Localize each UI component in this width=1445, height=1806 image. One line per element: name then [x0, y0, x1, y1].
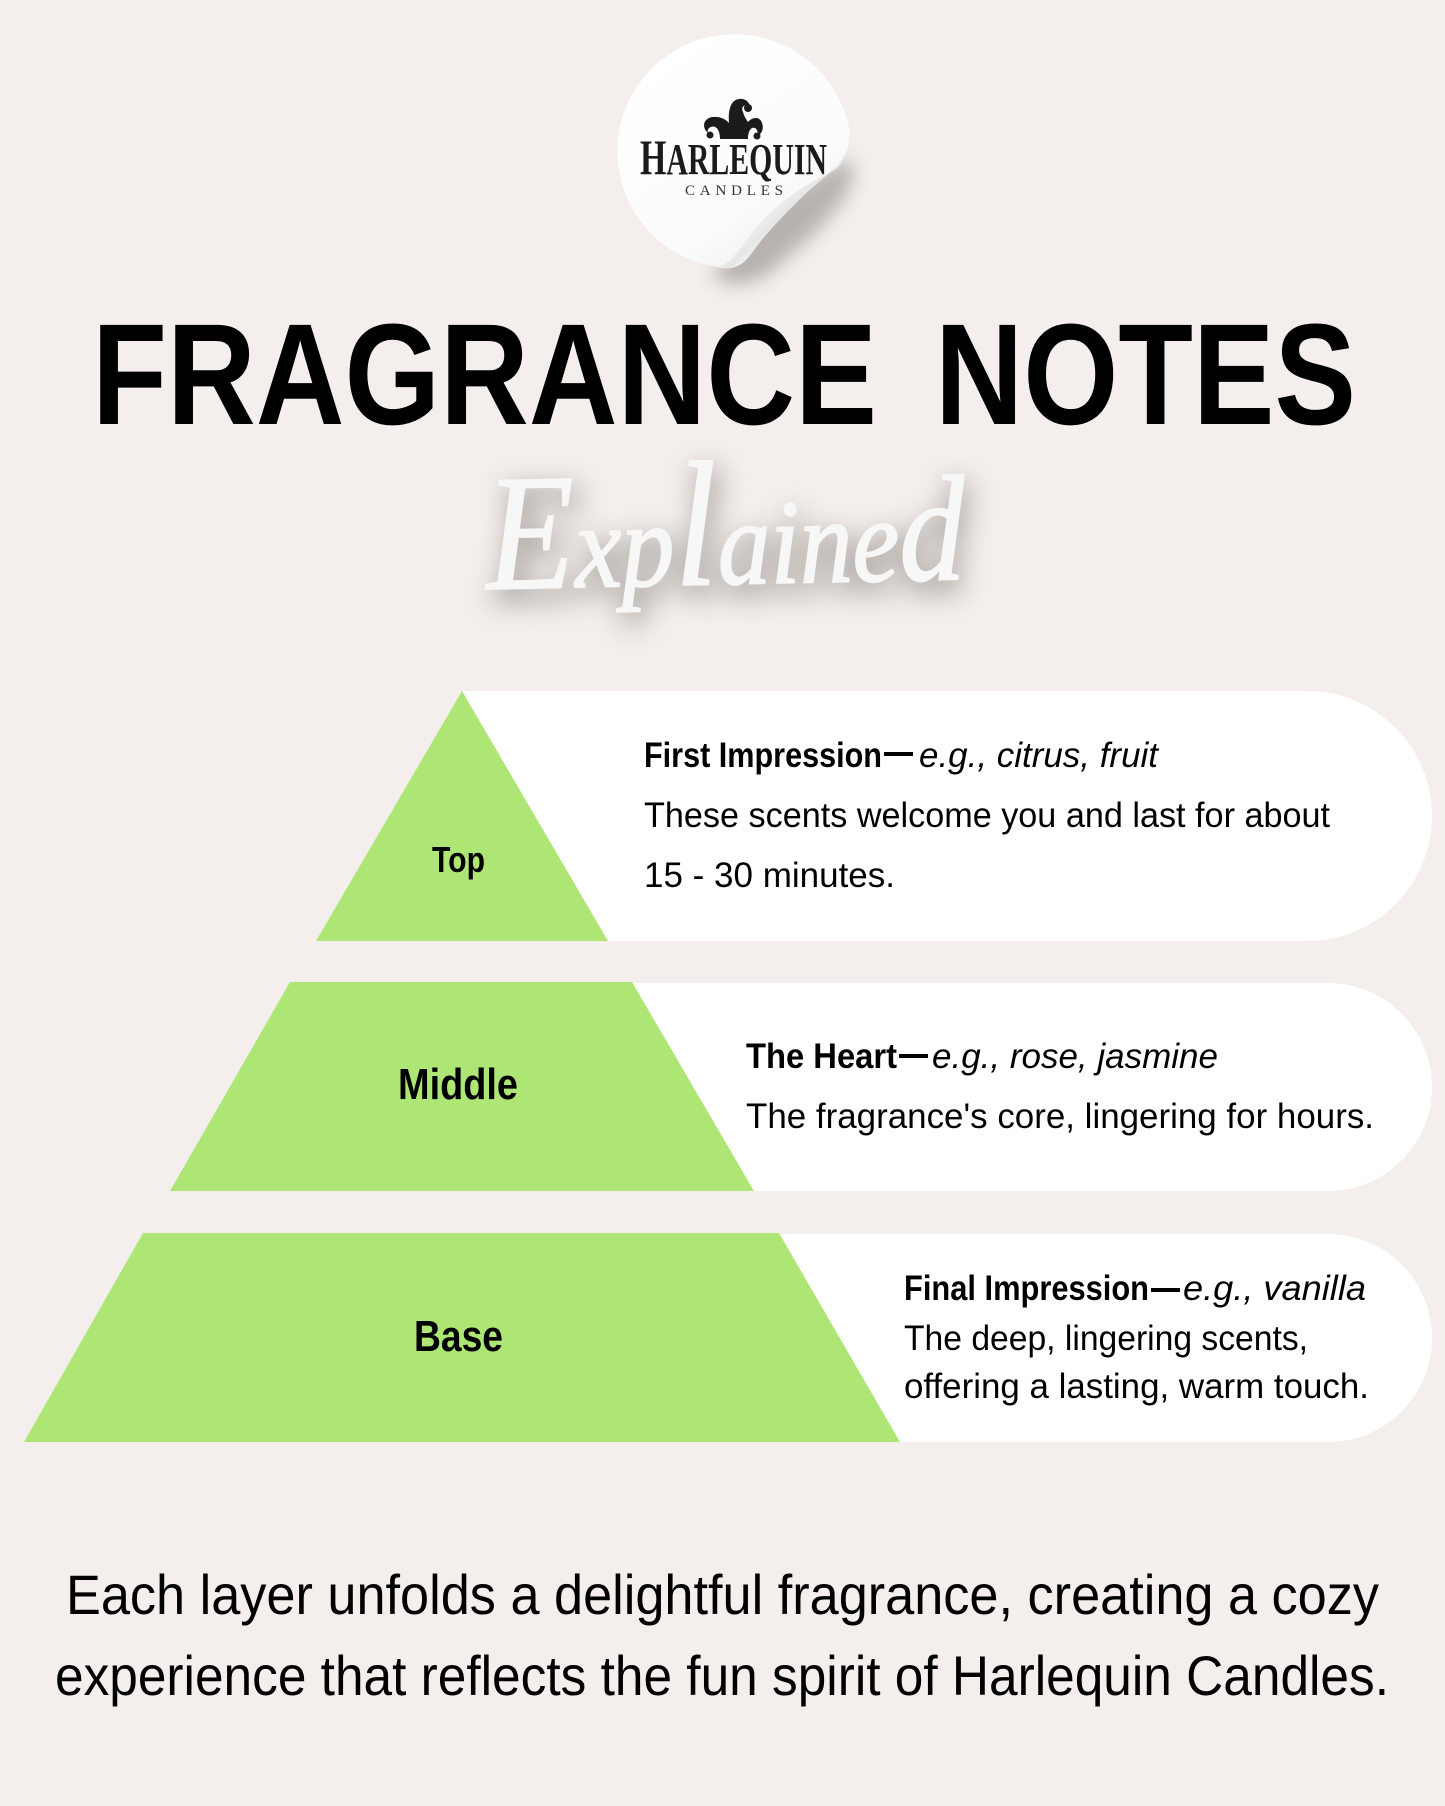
- title: NOTES: [935, 294, 1356, 455]
- text: top note heading: e.g., citrus, fruit: [919, 736, 1159, 775]
- panel: middle note card: [170, 982, 1432, 1191]
- text: top note heading: First Impression: [644, 736, 882, 775]
- label: Top: Top: [432, 839, 485, 880]
- text: middle note heading: [746, 1037, 1218, 1076]
- text: middle note body: The fragrance's core, lingering for hours.: [746, 1097, 1374, 1136]
- title: FRAGRANCE: [92, 294, 877, 455]
- panel: top note card: [316, 691, 1432, 941]
- text: base note body: [904, 1319, 1369, 1406]
- text: middle note heading: The Heart: [746, 1037, 897, 1076]
- icon: jester hat: [704, 99, 763, 140]
- text: middle note heading: e.g., rose, jasmine: [932, 1037, 1218, 1076]
- subtitle: Explained: Explained: [482, 420, 968, 628]
- logo sticker: [617, 34, 853, 284]
- logo wordmark: HARLEQUIN: [640, 129, 827, 185]
- text: top note body: These scents welcome you and last for about: [644, 796, 1330, 835]
- text: base note heading: [904, 1269, 1366, 1308]
- label: Middle: Middle: [398, 1060, 518, 1109]
- text: base note heading: e.g., vanilla: [1183, 1269, 1366, 1308]
- panel: base note card: [24, 1233, 1432, 1442]
- text: top note body: 15 - 30 minutes.: [644, 856, 895, 895]
- text: base note body: offering a lasting, warm touch.: [904, 1367, 1369, 1406]
- closing statement: [55, 1563, 1389, 1707]
- text: top note heading: [644, 736, 1159, 775]
- text: top note body: [644, 796, 1330, 895]
- pyramid tier: base: [24, 1233, 900, 1442]
- logo subtitle: CANDLES: [685, 183, 783, 199]
- closing statement: Each layer unfolds a delightful fragrance, creating a cozy: [66, 1563, 1379, 1626]
- subtitle: Explained: Explained: [488, 430, 970, 638]
- text: base note heading: Final Impression: [904, 1269, 1149, 1308]
- pyramid tier: middle: [170, 982, 754, 1191]
- text: base note body: The deep, lingering scents,: [904, 1319, 1308, 1358]
- label: Base: Base: [414, 1312, 503, 1361]
- pyramid tier: top: [316, 691, 608, 941]
